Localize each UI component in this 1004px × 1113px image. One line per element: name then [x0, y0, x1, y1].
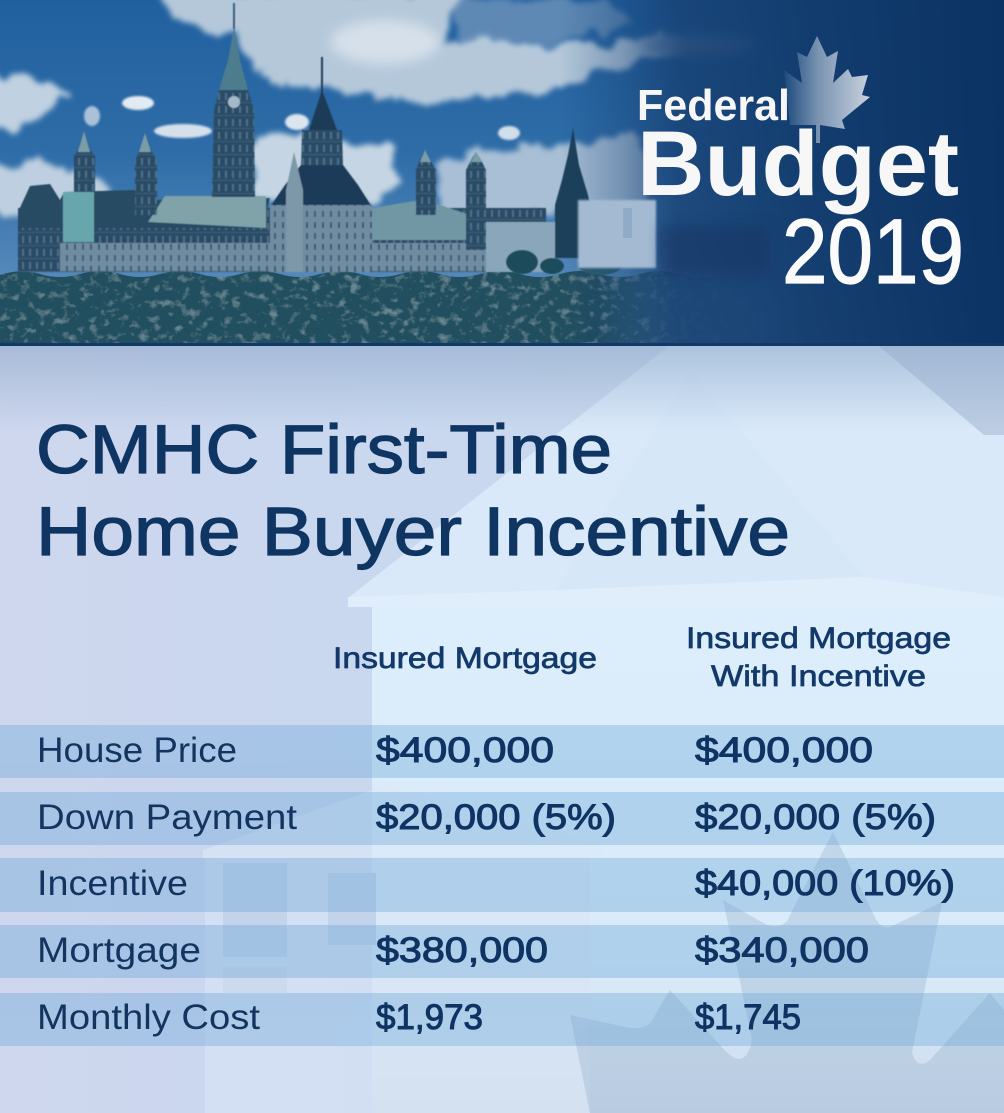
row: down payment: $20,000 (5%) — [695, 798, 936, 837]
east block roof — [372, 200, 470, 240]
house wall — [372, 606, 1004, 1113]
navy fade overlay — [560, 0, 1004, 345]
row: down payment: $20,000 (5%) — [376, 798, 616, 837]
east wing — [486, 222, 556, 272]
library spire — [309, 90, 337, 130]
2019 word: 2019 — [782, 201, 964, 303]
row: mortgage — [37, 931, 869, 970]
scaffold block — [63, 192, 94, 242]
flag pole — [233, 3, 235, 29]
porch railings — [223, 967, 287, 993]
row: house price: $400,000 — [376, 731, 554, 770]
soft shadow under header — [0, 345, 1004, 430]
library drum — [301, 130, 343, 168]
centre cloud — [255, 135, 395, 200]
library pinnacles — [286, 152, 303, 272]
header: insured mortgage: Insured Mortgage — [333, 642, 597, 675]
west tower 1 cap — [78, 131, 90, 152]
row: down payment — [37, 798, 936, 837]
row: house price — [37, 731, 873, 770]
east tower 1 — [416, 150, 436, 215]
library base — [270, 205, 372, 272]
header banner — [0, 0, 1004, 346]
header: insured mortgage with incentive: Insured Mortgage — [686, 622, 951, 655]
east tower 2 cap — [471, 152, 482, 162]
house roof — [348, 346, 1004, 606]
central block roof — [148, 196, 266, 228]
row: monthly cost — [37, 998, 801, 1037]
far right tower — [555, 128, 591, 258]
maple leaf — [784, 36, 870, 143]
roof gable face — [556, 372, 865, 600]
row: house price: $400,000 — [695, 731, 873, 770]
Peace Tower — [212, 3, 255, 197]
header: insured mortgage with incentive: With Incentive — [711, 660, 926, 693]
east tower 1 cap — [420, 150, 431, 162]
bottom edge of banner — [0, 343, 1004, 346]
left low cloud — [0, 161, 108, 215]
row: monthly cost: $1,745 — [695, 998, 801, 1037]
row: monthly cost: Monthly Cost — [37, 998, 260, 1037]
column headers — [333, 622, 951, 693]
library finial — [321, 57, 323, 92]
clock — [228, 96, 240, 108]
west tower 2 cap — [139, 133, 151, 152]
cloud highlight — [330, 20, 440, 64]
background illustration: faint house and maple leaf — [203, 346, 1004, 1113]
porch window left — [223, 863, 287, 957]
tower shaft — [212, 90, 255, 197]
row: mortgage: $380,000 — [376, 931, 548, 970]
row: mortgage: $340,000 — [695, 931, 869, 970]
row: down payment: Down Payment — [37, 798, 297, 837]
comparison table — [0, 725, 1004, 1046]
right cloud — [440, 130, 650, 220]
clouds — [0, 0, 760, 220]
title line 1: CMHC First-Time — [36, 411, 612, 488]
left wing roof — [18, 184, 270, 228]
house eave — [348, 577, 1004, 607]
row: incentive — [37, 864, 955, 903]
Federal word: Federal — [637, 81, 790, 130]
west tower 2 — [135, 133, 157, 215]
row: monthly cost: $1,973 — [376, 998, 483, 1037]
tower spire — [219, 27, 248, 90]
lower stone wall — [60, 243, 500, 271]
sky — [0, 0, 1004, 345]
library dome — [270, 165, 372, 207]
row: incentive: $40,000 (10%) — [695, 864, 955, 903]
east tower 2 — [466, 152, 486, 250]
pale building block — [578, 200, 656, 268]
Budget word: Budget — [637, 113, 959, 215]
row: incentive: Incentive — [37, 864, 188, 903]
title line 2: Home Buyer Incentive — [36, 493, 790, 570]
dark upper right corner — [879, 346, 1004, 437]
building mass — [18, 208, 546, 272]
main upper cloud — [150, 0, 690, 101]
porch window right — [328, 873, 376, 945]
small clouds — [84, 96, 520, 140]
west tower 1 — [74, 131, 95, 195]
row: mortgage: Mortgage — [37, 931, 201, 970]
Library of Parliament — [270, 57, 372, 272]
faint clouds on the right — [640, 35, 760, 55]
Parliament buildings — [18, 3, 622, 275]
row: house price: House Price — [37, 731, 237, 770]
forest on the hill — [0, 271, 694, 343]
maple leaf watermark — [570, 832, 1004, 1113]
porch roof — [203, 785, 602, 858]
left cloud — [0, 73, 70, 131]
blurred building shapes — [660, 225, 770, 275]
pale block window — [623, 208, 632, 238]
main title — [36, 411, 790, 570]
small trees right — [506, 250, 538, 274]
logo: Federal Budget 2019 — [637, 36, 964, 303]
row bands — [0, 725, 1004, 1046]
front porch — [203, 785, 602, 1113]
upper dark cloud — [455, 0, 640, 45]
porch body — [205, 856, 590, 1113]
header: insured mortgage with incentive — [686, 622, 951, 693]
